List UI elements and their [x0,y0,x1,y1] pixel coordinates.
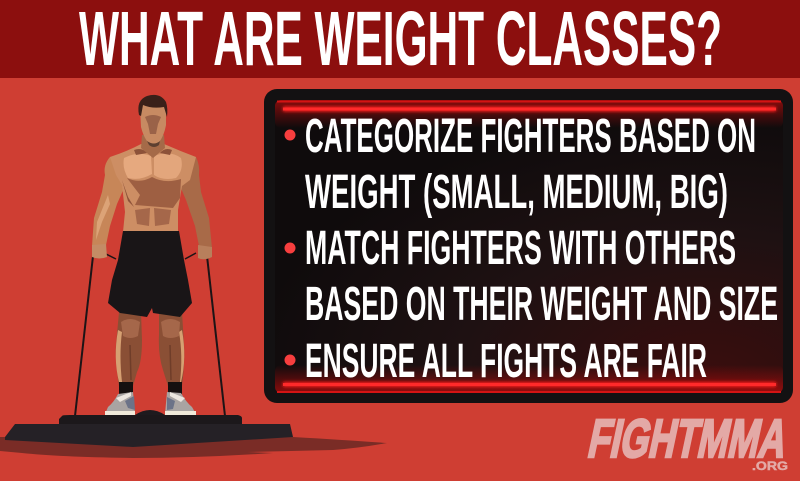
exercise platform [5,410,293,447]
shoes [105,392,196,415]
neon borders [275,100,783,393]
bullet: categorize fighters [284,110,756,219]
platform shadow [0,437,387,458]
info panel [264,89,793,403]
resistance bands [75,253,225,416]
legs [116,312,184,386]
bullet: match fighters [284,222,778,331]
socks [119,382,182,394]
fighter illustration [75,95,225,416]
logo: FightMMA.org: .ORG [752,459,788,473]
neck [141,135,165,158]
shorts [108,231,192,317]
head [138,95,167,147]
torso [110,144,196,232]
arms [92,157,212,259]
title banner [0,0,800,82]
hair [138,95,167,117]
